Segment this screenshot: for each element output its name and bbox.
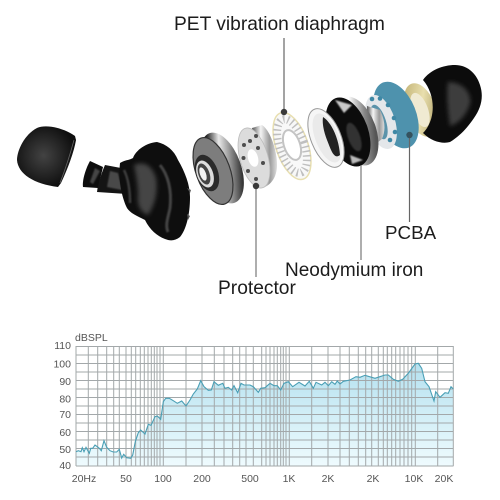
icon: protector plate	[232, 124, 277, 192]
y axis labels: 80	[59, 394, 71, 406]
x axis labels: 50	[120, 473, 132, 485]
leader line: PCBA	[406, 132, 413, 222]
leader line: protector	[253, 183, 259, 277]
y axis labels: 60	[59, 427, 71, 439]
icon: black rear shell	[423, 65, 482, 143]
y axis labels	[53, 340, 71, 472]
icon: gold ring	[397, 79, 445, 141]
label: Neodymium iron: Neodymium iron	[285, 260, 423, 281]
area under response curve	[76, 363, 453, 466]
x axis labels: 10K	[405, 473, 423, 485]
icon: blue PCBA board	[364, 75, 428, 155]
icon: metal driver cup	[185, 127, 253, 210]
x axis labels: 20K	[435, 473, 453, 485]
y axis labels: 50	[59, 444, 71, 456]
y axis labels: 110	[54, 340, 71, 352]
y axis labels: 40	[59, 460, 71, 472]
icon: PET vibration diaphragm	[265, 108, 319, 184]
x axis labels: 200	[193, 473, 211, 485]
exploded earphone diagram	[17, 38, 482, 277]
y axis labels: 90	[59, 376, 71, 388]
label: PET vibration diaphragm: PET vibration diaphragm	[174, 14, 385, 35]
chart grid	[76, 346, 454, 466]
icon: earphone front housing	[83, 142, 191, 240]
x axis labels: 2K	[322, 473, 334, 485]
frequency response chart	[53, 332, 454, 485]
y axis labels: 70	[59, 409, 71, 421]
y axis labels: 100	[53, 358, 71, 370]
x axis labels: 20Hz	[72, 473, 96, 485]
response curve	[76, 363, 453, 458]
label: PCBA: PCBA	[385, 222, 437, 243]
leader line: neodymium	[360, 165, 362, 260]
x axis labels: 100	[154, 473, 172, 485]
x axis labels: 2K	[367, 473, 379, 485]
icon: silicone ear tip	[17, 126, 76, 187]
x axis labels: 1K	[283, 473, 295, 485]
icon: white circuit ring	[359, 91, 403, 153]
label: Protector: Protector	[218, 278, 296, 299]
leader line: PET	[281, 38, 287, 115]
y axis title: dBSPL	[75, 332, 108, 344]
x axis labels: 500	[241, 473, 259, 485]
x axis labels	[72, 473, 453, 485]
icon: neodymium iron magnet ring	[300, 90, 387, 173]
